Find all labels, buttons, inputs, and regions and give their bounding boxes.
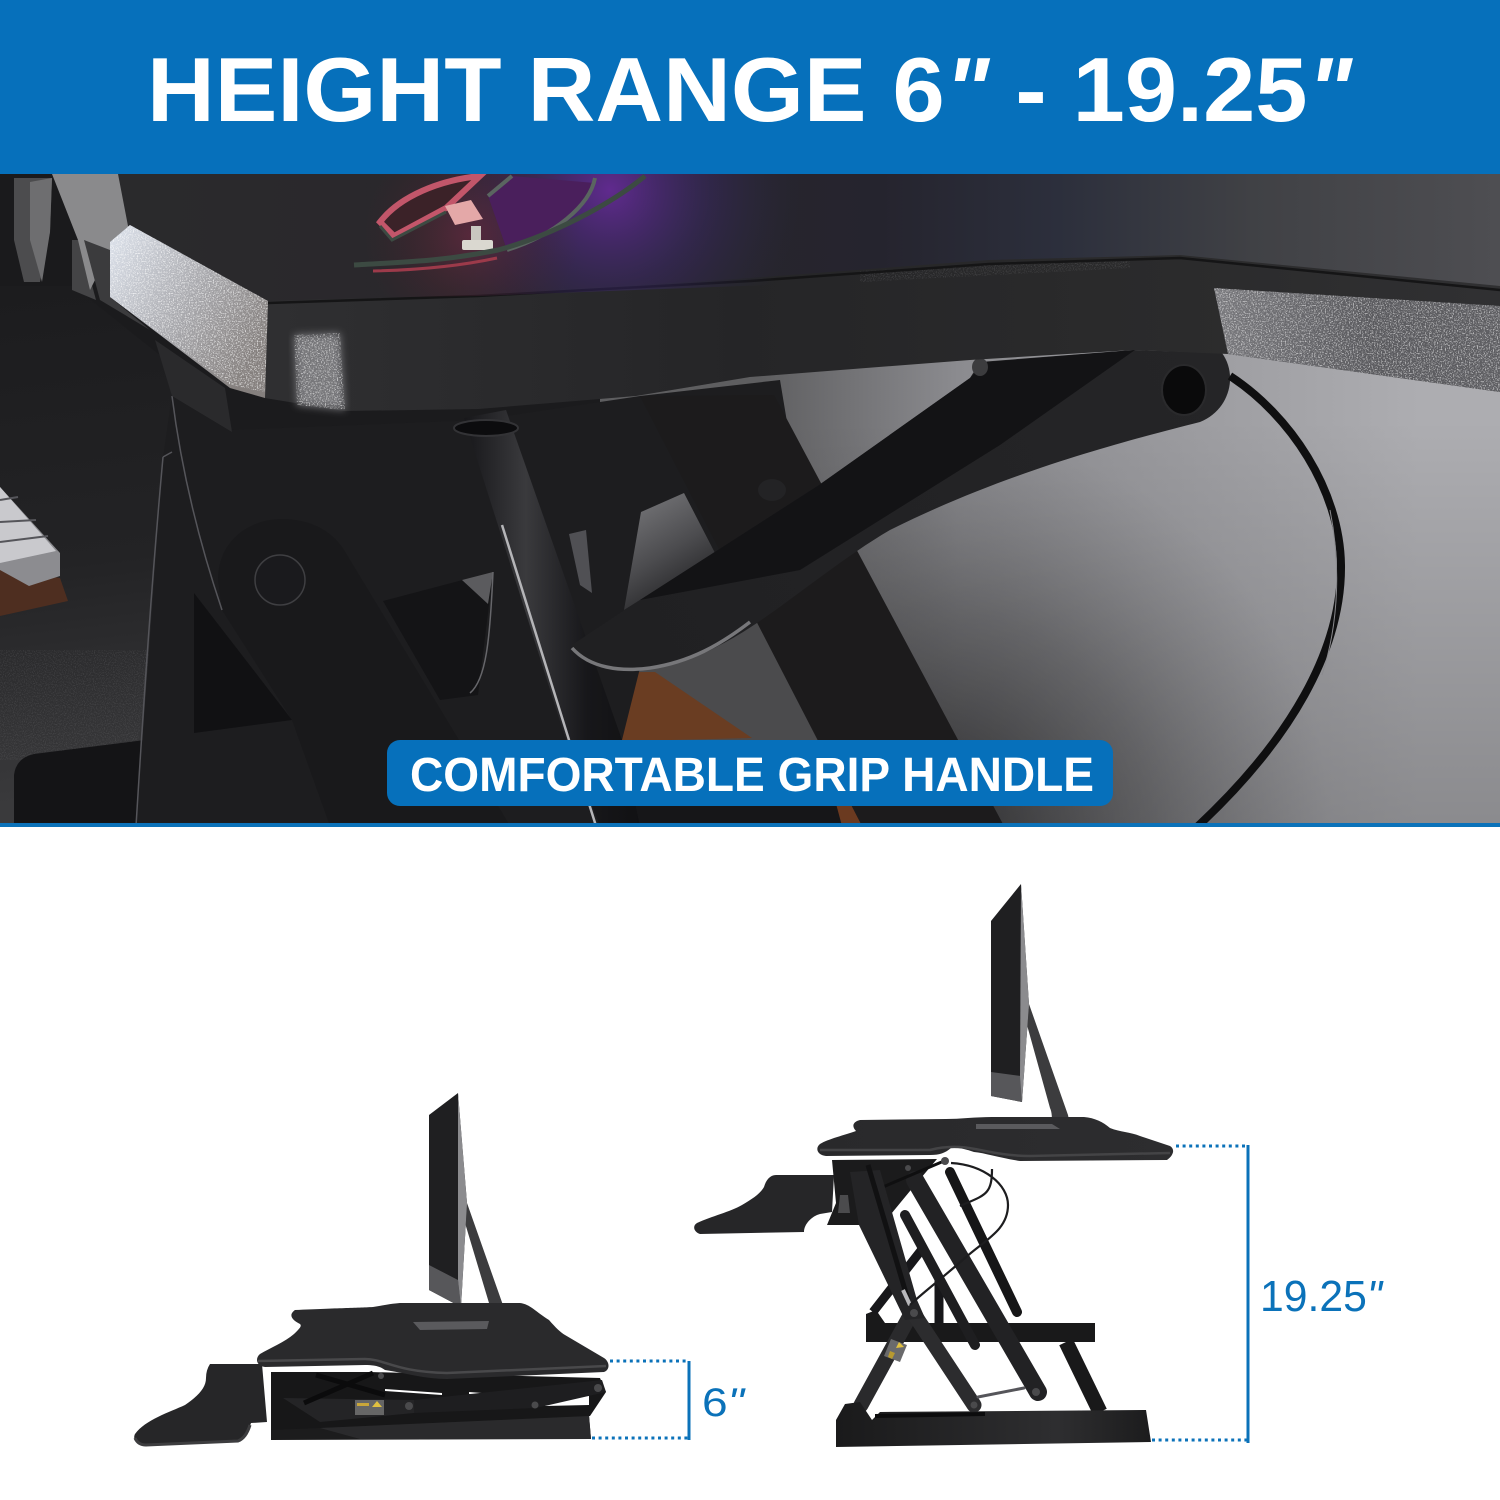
front arm upper section [850,1170,925,1320]
platform front edge [258,1359,606,1373]
textured highlights on desk edge [110,225,1500,410]
left under-desk bracket [155,340,232,432]
photo panel: grip handle close-up [0,174,1500,830]
power cable [1198,376,1341,826]
platform front edge [820,1147,1170,1156]
strut tip [903,1290,910,1305]
eyeglasses with coloured reflection [354,174,762,296]
monitor [991,884,1029,1102]
keyboard tray [694,1175,834,1234]
nose bridge [445,200,483,225]
left lens frame [380,176,480,236]
main scissor plate [136,380,800,826]
nose pad [462,226,493,250]
desktop platform [257,1303,608,1379]
desk top surface [118,174,1500,303]
right lens frame [488,176,595,250]
title banner [0,0,1500,174]
monitor foot plate [413,1321,489,1330]
handle arm with grip [572,350,1230,669]
strut [868,1165,908,1300]
warning label [355,1400,384,1415]
title: HEIGHT RANGE 6 " - 19.25" [147,40,1354,141]
keyboard tray surface [0,556,156,823]
thin edge line of frame [136,396,222,826]
desk left side face [110,225,268,398]
keyboard tray [134,1364,267,1445]
monitor [429,1093,467,1307]
rear leg and cross bar [866,1248,1100,1412]
right diagonal leg [757,418,1002,823]
monitor stand [976,1004,1069,1129]
grip lower edge [572,622,750,669]
scissor arms [861,1161,1038,1405]
grey gaps behind the frame [462,493,715,693]
product: standing desk lowered to 6 in [134,1093,608,1445]
warning label [884,1339,907,1362]
cables [910,1163,1008,1305]
photo bottom rule [0,823,1500,827]
tray front edge [135,1425,250,1445]
19.25 in label: 19.25" [1260,1272,1384,1321]
wooden wrist pad under keyboard [0,567,68,616]
base [836,1402,1151,1447]
monitor stand [413,1203,504,1330]
background wall [600,340,1500,830]
gas spring pole [454,410,640,826]
bracket grey triangle [838,1195,850,1213]
base [271,1405,591,1440]
tray bracket [827,1159,937,1225]
monitor foot plate [976,1124,1060,1129]
callout: comfortable grip handle: COMFORTABLE GRIP HANDLE [410,749,1094,802]
6 in label: 6" [702,1381,746,1425]
upper-left background supports [14,174,149,330]
handle bolt [1162,365,1206,415]
surface top edge highlight [268,258,1500,303]
bolts [378,1373,602,1410]
lift frame arms [271,1372,606,1439]
temple arm [354,176,645,265]
desk front edge [230,255,1500,411]
pivot rivet [255,555,305,605]
large pivot arm plate [254,554,306,606]
keyboard [0,487,60,586]
rivet [758,479,786,501]
product: standing desk raised to 19.25 in [694,884,1173,1447]
wood desk and grey floor pieces [622,672,860,823]
desktop platform [817,1117,1173,1161]
bolts [905,1157,1040,1408]
